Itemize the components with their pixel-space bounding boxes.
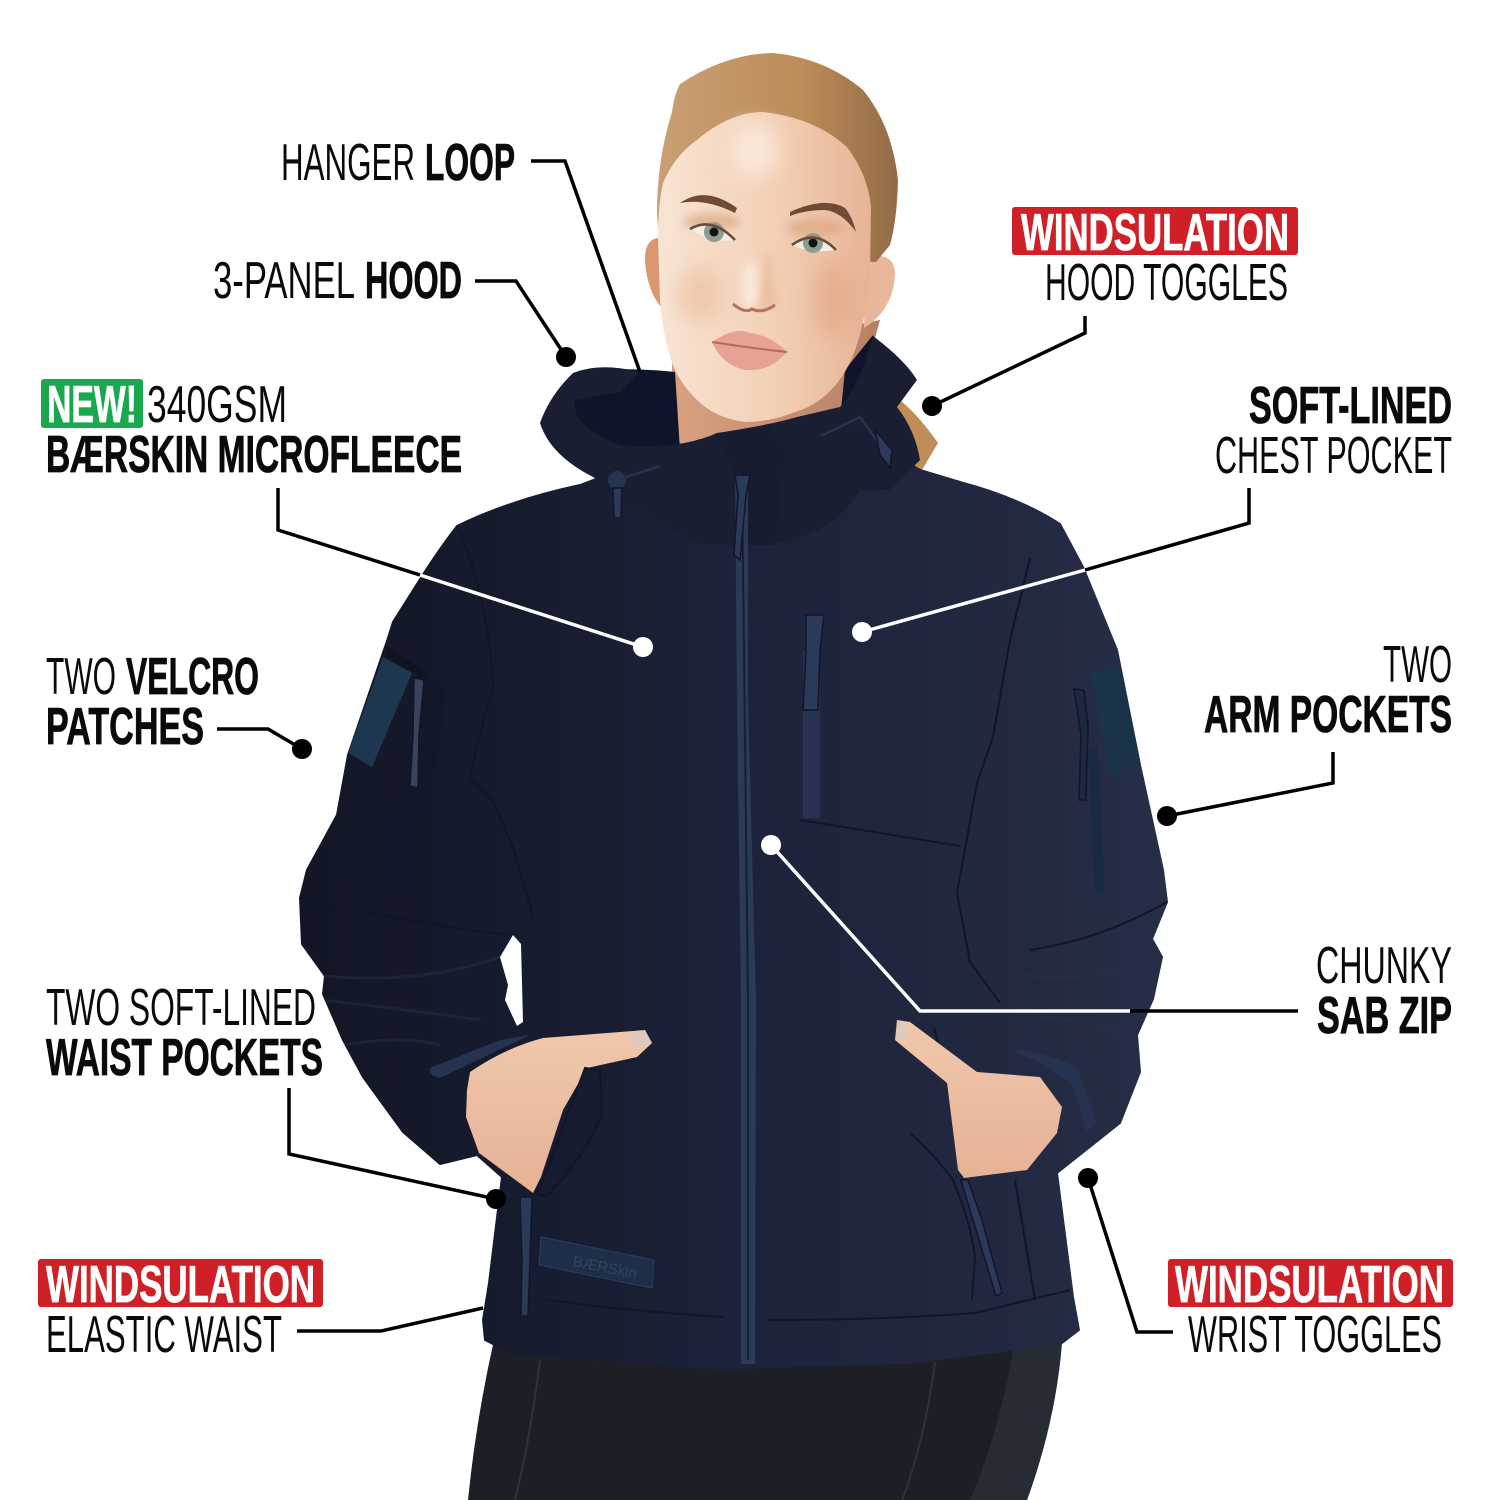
label	[1215, 377, 1452, 485]
main zip	[735, 475, 756, 1364]
eyes	[690, 222, 836, 253]
ears	[645, 238, 895, 328]
callout: waist pockets	[46, 979, 506, 1209]
hem and seams	[300, 526, 1167, 1320]
model wearing the fleece jacket	[300, 53, 1167, 1500]
leader line and dot	[852, 488, 1249, 642]
sleeve fold highlights	[325, 956, 500, 1046]
label: VELCRO	[126, 648, 259, 706]
label: HOOD	[365, 252, 462, 310]
wrist toggles	[430, 1035, 1097, 1132]
leader line and dot	[289, 1088, 506, 1209]
label: WAIST POCKETS	[46, 1029, 323, 1087]
collar placket	[715, 425, 785, 545]
label: BÆRSKIN MICROFLEECE	[46, 426, 462, 484]
waist pocket zip pulls	[520, 1180, 1002, 1316]
callout: elastic waist	[38, 1256, 483, 1364]
label: TWO	[46, 648, 116, 706]
hands	[466, 1020, 1062, 1193]
cheek and forehead shading	[678, 122, 857, 338]
callout: soft-lined chest pocket	[852, 377, 1452, 642]
jacket body and sleeves	[300, 440, 1167, 1370]
hood	[540, 336, 920, 545]
callout: arm pockets	[1157, 636, 1452, 826]
label: HOOD TOGGLES	[1045, 254, 1288, 312]
side gap between sleeve and body	[500, 935, 523, 1026]
red badge: WINDSULATION	[46, 1256, 315, 1314]
label	[46, 979, 323, 1087]
leader line and dot	[475, 281, 576, 367]
face	[658, 112, 871, 422]
label	[46, 648, 259, 756]
callout: 340gsm microfleece	[41, 376, 653, 657]
rubber logo patch	[539, 1237, 654, 1288]
leader line	[297, 1308, 483, 1331]
hood interior	[560, 369, 680, 470]
thumbnails	[630, 1020, 906, 1047]
callout: hanger loop	[281, 134, 640, 372]
callout: sab zip	[761, 835, 1452, 1045]
nose	[733, 250, 778, 311]
zip top pull	[734, 475, 750, 560]
right arm patch and zip	[1074, 664, 1140, 893]
leader line and dot	[1157, 752, 1333, 826]
red badge	[1012, 204, 1298, 262]
label: LOOP	[425, 134, 515, 192]
label: 3-PANEL	[213, 252, 355, 310]
leggings	[468, 1340, 1062, 1500]
leader line and dot	[761, 835, 1298, 1011]
label: PATCHES	[46, 698, 204, 756]
leader line	[531, 161, 640, 372]
hood toggles	[608, 417, 892, 518]
lips	[712, 331, 787, 370]
label: HANGER	[281, 134, 415, 192]
neck	[672, 320, 880, 450]
label	[1204, 636, 1452, 744]
eye sockets	[684, 213, 843, 237]
callout: windsulation hood toggles	[922, 204, 1298, 416]
label	[1316, 937, 1452, 1045]
label: ELASTIC WAIST	[46, 1306, 282, 1364]
label	[46, 376, 462, 484]
green badge	[41, 376, 143, 434]
callout: wrist toggles	[1078, 1168, 1453, 1364]
eyebrows	[680, 195, 856, 232]
pocket flaps	[535, 1068, 975, 1300]
label: 340GSM	[147, 376, 287, 434]
rubber logo patch: BÆRSkin	[571, 1253, 638, 1282]
callout: velcro patches	[46, 648, 312, 759]
red badge: WINDSULATION	[1021, 204, 1289, 262]
red badge	[38, 1256, 323, 1314]
leader line and dot	[217, 729, 312, 759]
green badge: NEW!	[47, 376, 137, 434]
label: TWO SOFT-LINED	[46, 979, 316, 1037]
left arm patch and zip	[348, 645, 445, 890]
ponytail	[893, 395, 938, 470]
right waist pocket opening	[934, 1027, 962, 1177]
callout: 3-panel hood	[213, 252, 576, 367]
leader line and dot	[922, 316, 1085, 416]
leader line and dot	[1078, 1168, 1173, 1332]
leader line and dot	[278, 488, 653, 657]
chest pocket zip	[803, 615, 824, 818]
hair	[657, 53, 898, 262]
